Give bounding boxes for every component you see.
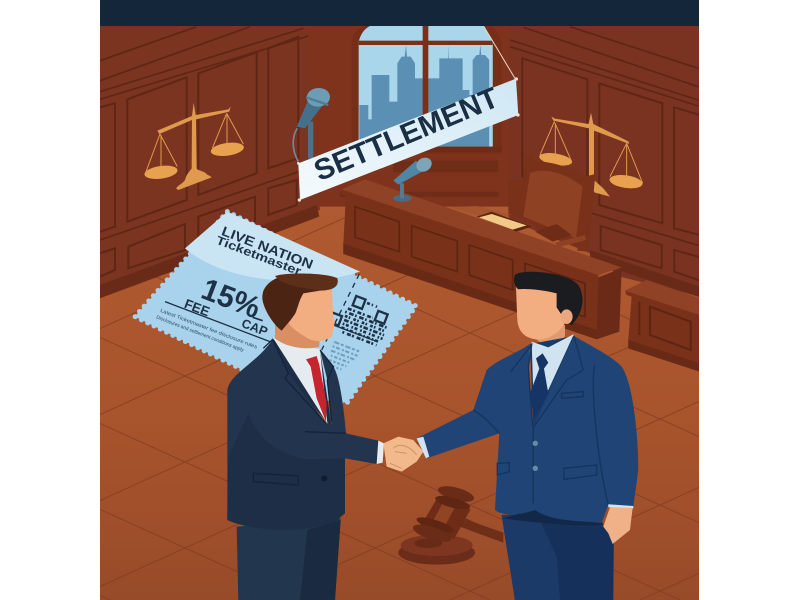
- document on bench: [477, 212, 532, 232]
- ticket fee text: 15%: [197, 272, 265, 325]
- neck: [535, 325, 565, 348]
- shirt: [532, 334, 574, 393]
- left wall: [100, 26, 320, 298]
- tie: [530, 353, 548, 420]
- judge's chair: [508, 155, 595, 252]
- hair: [514, 272, 582, 325]
- icon: left microphone: [293, 87, 331, 162]
- neck: [275, 322, 320, 348]
- window: [359, 26, 493, 147]
- right wall: [508, 26, 700, 297]
- banner: [297, 77, 520, 202]
- ticket fee text: [184, 280, 268, 334]
- hair: [262, 274, 338, 331]
- ticket fee text: CAP: [240, 316, 270, 339]
- icon: bench microphone: [393, 158, 432, 202]
- QR code: [332, 294, 390, 346]
- foreground: [227, 272, 638, 600]
- banner text: SETTLEMENT: [309, 81, 503, 188]
- bench front: [343, 195, 598, 339]
- microphone and banner: [293, 27, 520, 202]
- ticket fee text: FEE: [182, 296, 212, 319]
- icon: gavel: [398, 483, 503, 565]
- shirt and tie: [273, 338, 327, 423]
- ticket fine print: Latest Ticketmaster fee disclosure rules: [159, 308, 258, 351]
- ear: [561, 309, 573, 324]
- banner ropes: [484, 27, 515, 78]
- icon: scales of justice left: [144, 103, 245, 190]
- face: [516, 287, 567, 339]
- ticket fine print: Disclosures and settlement conditions apply: [155, 315, 245, 354]
- man right: [417, 272, 638, 600]
- top bar: [100, 0, 700, 26]
- trousers: [237, 518, 341, 600]
- back wall: [308, 26, 510, 207]
- floor: [100, 190, 700, 600]
- ticket body: [135, 212, 416, 403]
- man left: [227, 273, 423, 600]
- face: [288, 288, 335, 341]
- side bench: [625, 280, 700, 372]
- icon: scales of justice right: [538, 113, 643, 197]
- bench top: [341, 179, 622, 275]
- jacket underlay: [273, 339, 332, 427]
- ticket: [135, 212, 416, 403]
- jacket underlay: [530, 336, 574, 428]
- ticket brand text: LIVE NATION: [220, 223, 315, 272]
- judge's bench: [341, 155, 700, 372]
- cuff and hand: [377, 441, 384, 464]
- cuff and hand: [608, 504, 633, 509]
- faded QR code: [329, 341, 360, 370]
- jacket: [417, 336, 638, 523]
- jacket: [227, 339, 378, 530]
- illustration: courtroom settlement scene: [100, 0, 699, 600]
- ticket brand text: Ticketmaster: [214, 233, 304, 279]
- trousers: [502, 515, 614, 600]
